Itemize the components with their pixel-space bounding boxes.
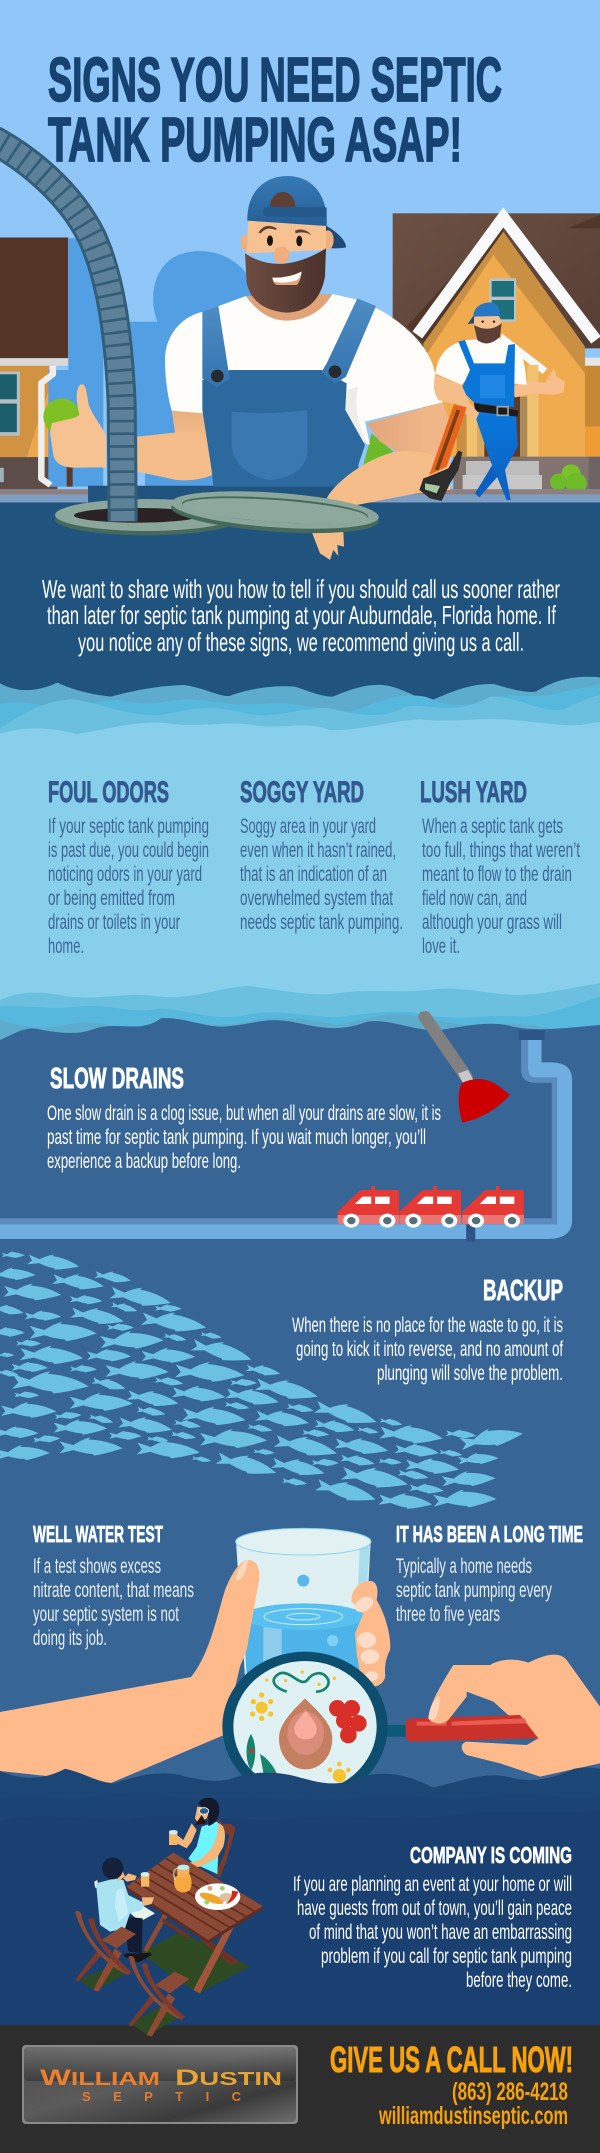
logo: W ILLIAM: [40, 2065, 160, 2090]
text: foul odors: is past due, you could begin: [48, 839, 209, 862]
background: light blue section: [0, 720, 600, 1040]
shirt: [435, 338, 527, 385]
text: foul odors: If your septic tank pumping: [48, 815, 209, 838]
text: soggy yard: overwhelmed system that: [240, 887, 393, 910]
van 1: [338, 1186, 399, 1228]
lower waves: [0, 983, 600, 1060]
magnifier lens: [222, 1652, 388, 1802]
text: slow drains: [47, 1102, 441, 1173]
head: [468, 303, 502, 343]
background: dark ground band: [0, 500, 600, 720]
head: [241, 220, 334, 313]
left hand and arm: [0, 1560, 259, 1783]
heading: lush yard: LUSH YARD: [420, 776, 527, 809]
text: it has been a long time: three to five years: [396, 1603, 500, 1626]
pointing arm with thumb up: [513, 368, 565, 397]
woman's chair back: [215, 1817, 236, 1877]
papers: [128, 1897, 155, 1922]
well water test: [33, 1521, 194, 1650]
hat brim behind: [325, 225, 346, 248]
belt: [474, 403, 518, 417]
column: soggy yard: [240, 776, 403, 934]
forearm: [327, 451, 450, 505]
wrench: [419, 404, 467, 501]
left chair: [75, 1911, 136, 1992]
text: backup: [292, 1314, 563, 1385]
left arm: [137, 411, 212, 480]
heading: well water test: WELL WATER TEST: [33, 1521, 163, 1547]
plunger: [425, 1017, 510, 1123]
hero: sidewalk and ground: [0, 486, 600, 502]
logo: D USTIN: [175, 2065, 282, 2090]
overalls: [202, 298, 376, 487]
background: navy section: [0, 1790, 600, 2030]
text: foul odors: noticing odors in your yard: [48, 863, 202, 886]
leaning arm: [434, 375, 479, 422]
intro text: [42, 574, 560, 657]
drain pipe: [0, 1030, 572, 1242]
text: slow drains: experience a backup before long.: [47, 1150, 241, 1173]
text: well water test: doing its job.: [33, 1627, 107, 1650]
front chair: [128, 1956, 189, 2037]
footer content: [22, 2039, 573, 2130]
text: soggy yard: even when it hasn’t rained,: [240, 839, 396, 862]
van 2: [400, 1186, 461, 1228]
magnifier connector: [385, 1725, 407, 1737]
hero: distant blue trees: [48, 238, 257, 487]
bottom waves: [0, 1767, 600, 1858]
table: [127, 1853, 263, 1993]
plate of food: [195, 1883, 240, 1910]
picnic table illustration: [75, 1798, 263, 2037]
overalls: [458, 340, 515, 407]
column: lush yard: [420, 776, 580, 958]
thumbs up hand: [50, 384, 106, 468]
heading: slow drains: SLOW DRAINS: [50, 1063, 184, 1095]
hero: large plumber: [0, 140, 450, 560]
text: well water test: your septic system is not: [33, 1603, 179, 1626]
top waves: [0, 677, 600, 760]
text: foul odors: drains or toilets in your: [48, 911, 180, 934]
fingers on glass: [352, 1581, 390, 1687]
neck: [247, 294, 332, 322]
finger on handle: [428, 1665, 467, 1724]
magnifier handle: [406, 1715, 538, 1742]
shirt: [165, 294, 443, 445]
text: foul odors: home.: [48, 935, 84, 958]
text: lush yard: love it.: [422, 935, 460, 958]
backup: [292, 1275, 563, 1385]
text: soggy yard: needs septic tank pumping.: [240, 911, 403, 934]
upper right arm: [367, 402, 450, 492]
manhole lid: [170, 485, 380, 539]
hero: small plumber with wrench: [419, 303, 565, 501]
hero: left house downspout: [41, 366, 53, 485]
slow drains: [47, 1063, 441, 1173]
it has been a long time: [396, 1521, 583, 1626]
hero: left house: [0, 237, 68, 489]
neck: [473, 333, 501, 347]
text: well water test: [33, 1555, 194, 1650]
hero: right house: [393, 213, 600, 494]
heading: soggy yard: SOGGY YARD: [240, 776, 364, 809]
van 3: [462, 1186, 524, 1228]
background: sky: [0, 0, 600, 540]
heading: foul odors: FOUL ODORS: [48, 776, 169, 809]
text: well water test: nitrate content, that means: [33, 1579, 194, 1602]
text: soggy yard: that is an indication of an: [240, 863, 387, 886]
text: company is coming: [293, 1873, 572, 1992]
text: foul odors: [48, 815, 209, 958]
column: foul odors: [48, 776, 209, 958]
text: soggy yard: [240, 815, 403, 934]
seated man: [94, 1857, 154, 1963]
text: soggy yard: Soggy area in your yard: [240, 815, 376, 838]
pocket: [480, 375, 505, 398]
open manhole: [55, 499, 238, 535]
text: well water test: If a test shows excess: [33, 1555, 161, 1578]
company is coming: [293, 1842, 572, 1992]
bush behind arm: [363, 433, 393, 465]
text: lush yard: [422, 815, 580, 958]
cap: [247, 176, 327, 226]
water test illustration: [0, 1528, 600, 1802]
footer panel: [0, 2025, 600, 2153]
jug and glass: [141, 1865, 192, 1892]
text: lush yard: field now can, and: [422, 887, 527, 910]
legs: [474, 408, 518, 500]
vans: [338, 1186, 524, 1228]
hose: [0, 140, 123, 522]
glass of water: [236, 1528, 371, 1677]
hand under lid: [312, 532, 344, 560]
grass: [78, 1932, 250, 2035]
title: [48, 46, 502, 175]
logo: SEPTIC: [82, 2089, 242, 2104]
shirt shading: [345, 387, 368, 445]
text: foul odors: or being emitted from: [48, 887, 175, 910]
background: mid blue section: [0, 1030, 600, 1810]
bush behind hand: [43, 398, 80, 487]
text: it has been a long time: [396, 1555, 552, 1626]
logo: [22, 2045, 298, 2124]
school of fish: [0, 1251, 525, 1511]
woman: [169, 1798, 225, 1874]
right hand: [428, 1655, 600, 1777]
